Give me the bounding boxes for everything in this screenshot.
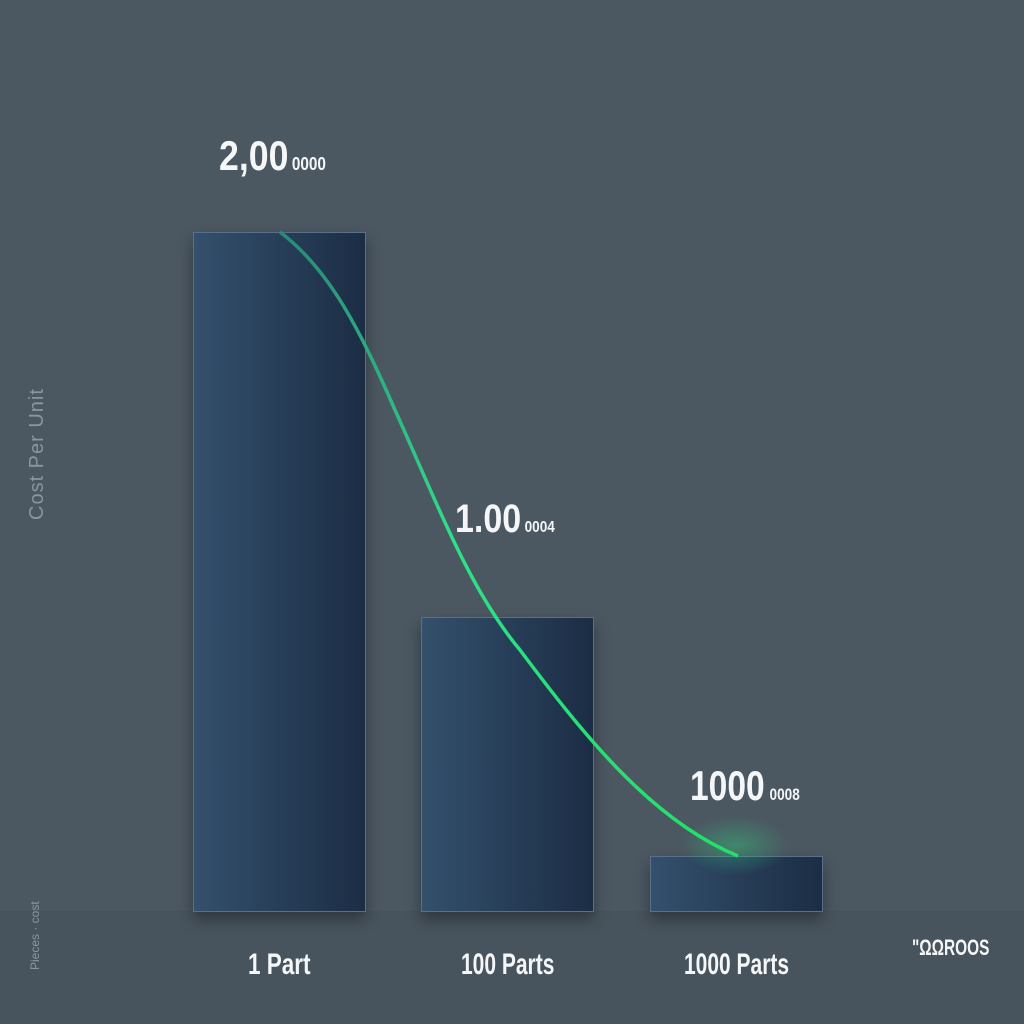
value label 1: 2,000000 — [219, 132, 326, 179]
bar: 1000 parts — [650, 856, 823, 912]
x label 3: 1000 Parts — [684, 948, 789, 981]
value label 3: 1000 0008 — [690, 762, 800, 809]
bar: 1 part — [193, 232, 366, 912]
axis note: Pieces · cost — [28, 901, 42, 970]
x label 2: 100 Parts — [461, 948, 554, 981]
ground band — [0, 911, 1024, 1024]
bar: 100 parts — [421, 617, 594, 912]
y-axis label: Cost Per Unit — [26, 388, 48, 520]
x axis unit: "ΩΩROOS — [912, 935, 989, 960]
x label 1: 1 Part — [248, 948, 311, 981]
value label 2: 1.000004 — [455, 497, 555, 541]
